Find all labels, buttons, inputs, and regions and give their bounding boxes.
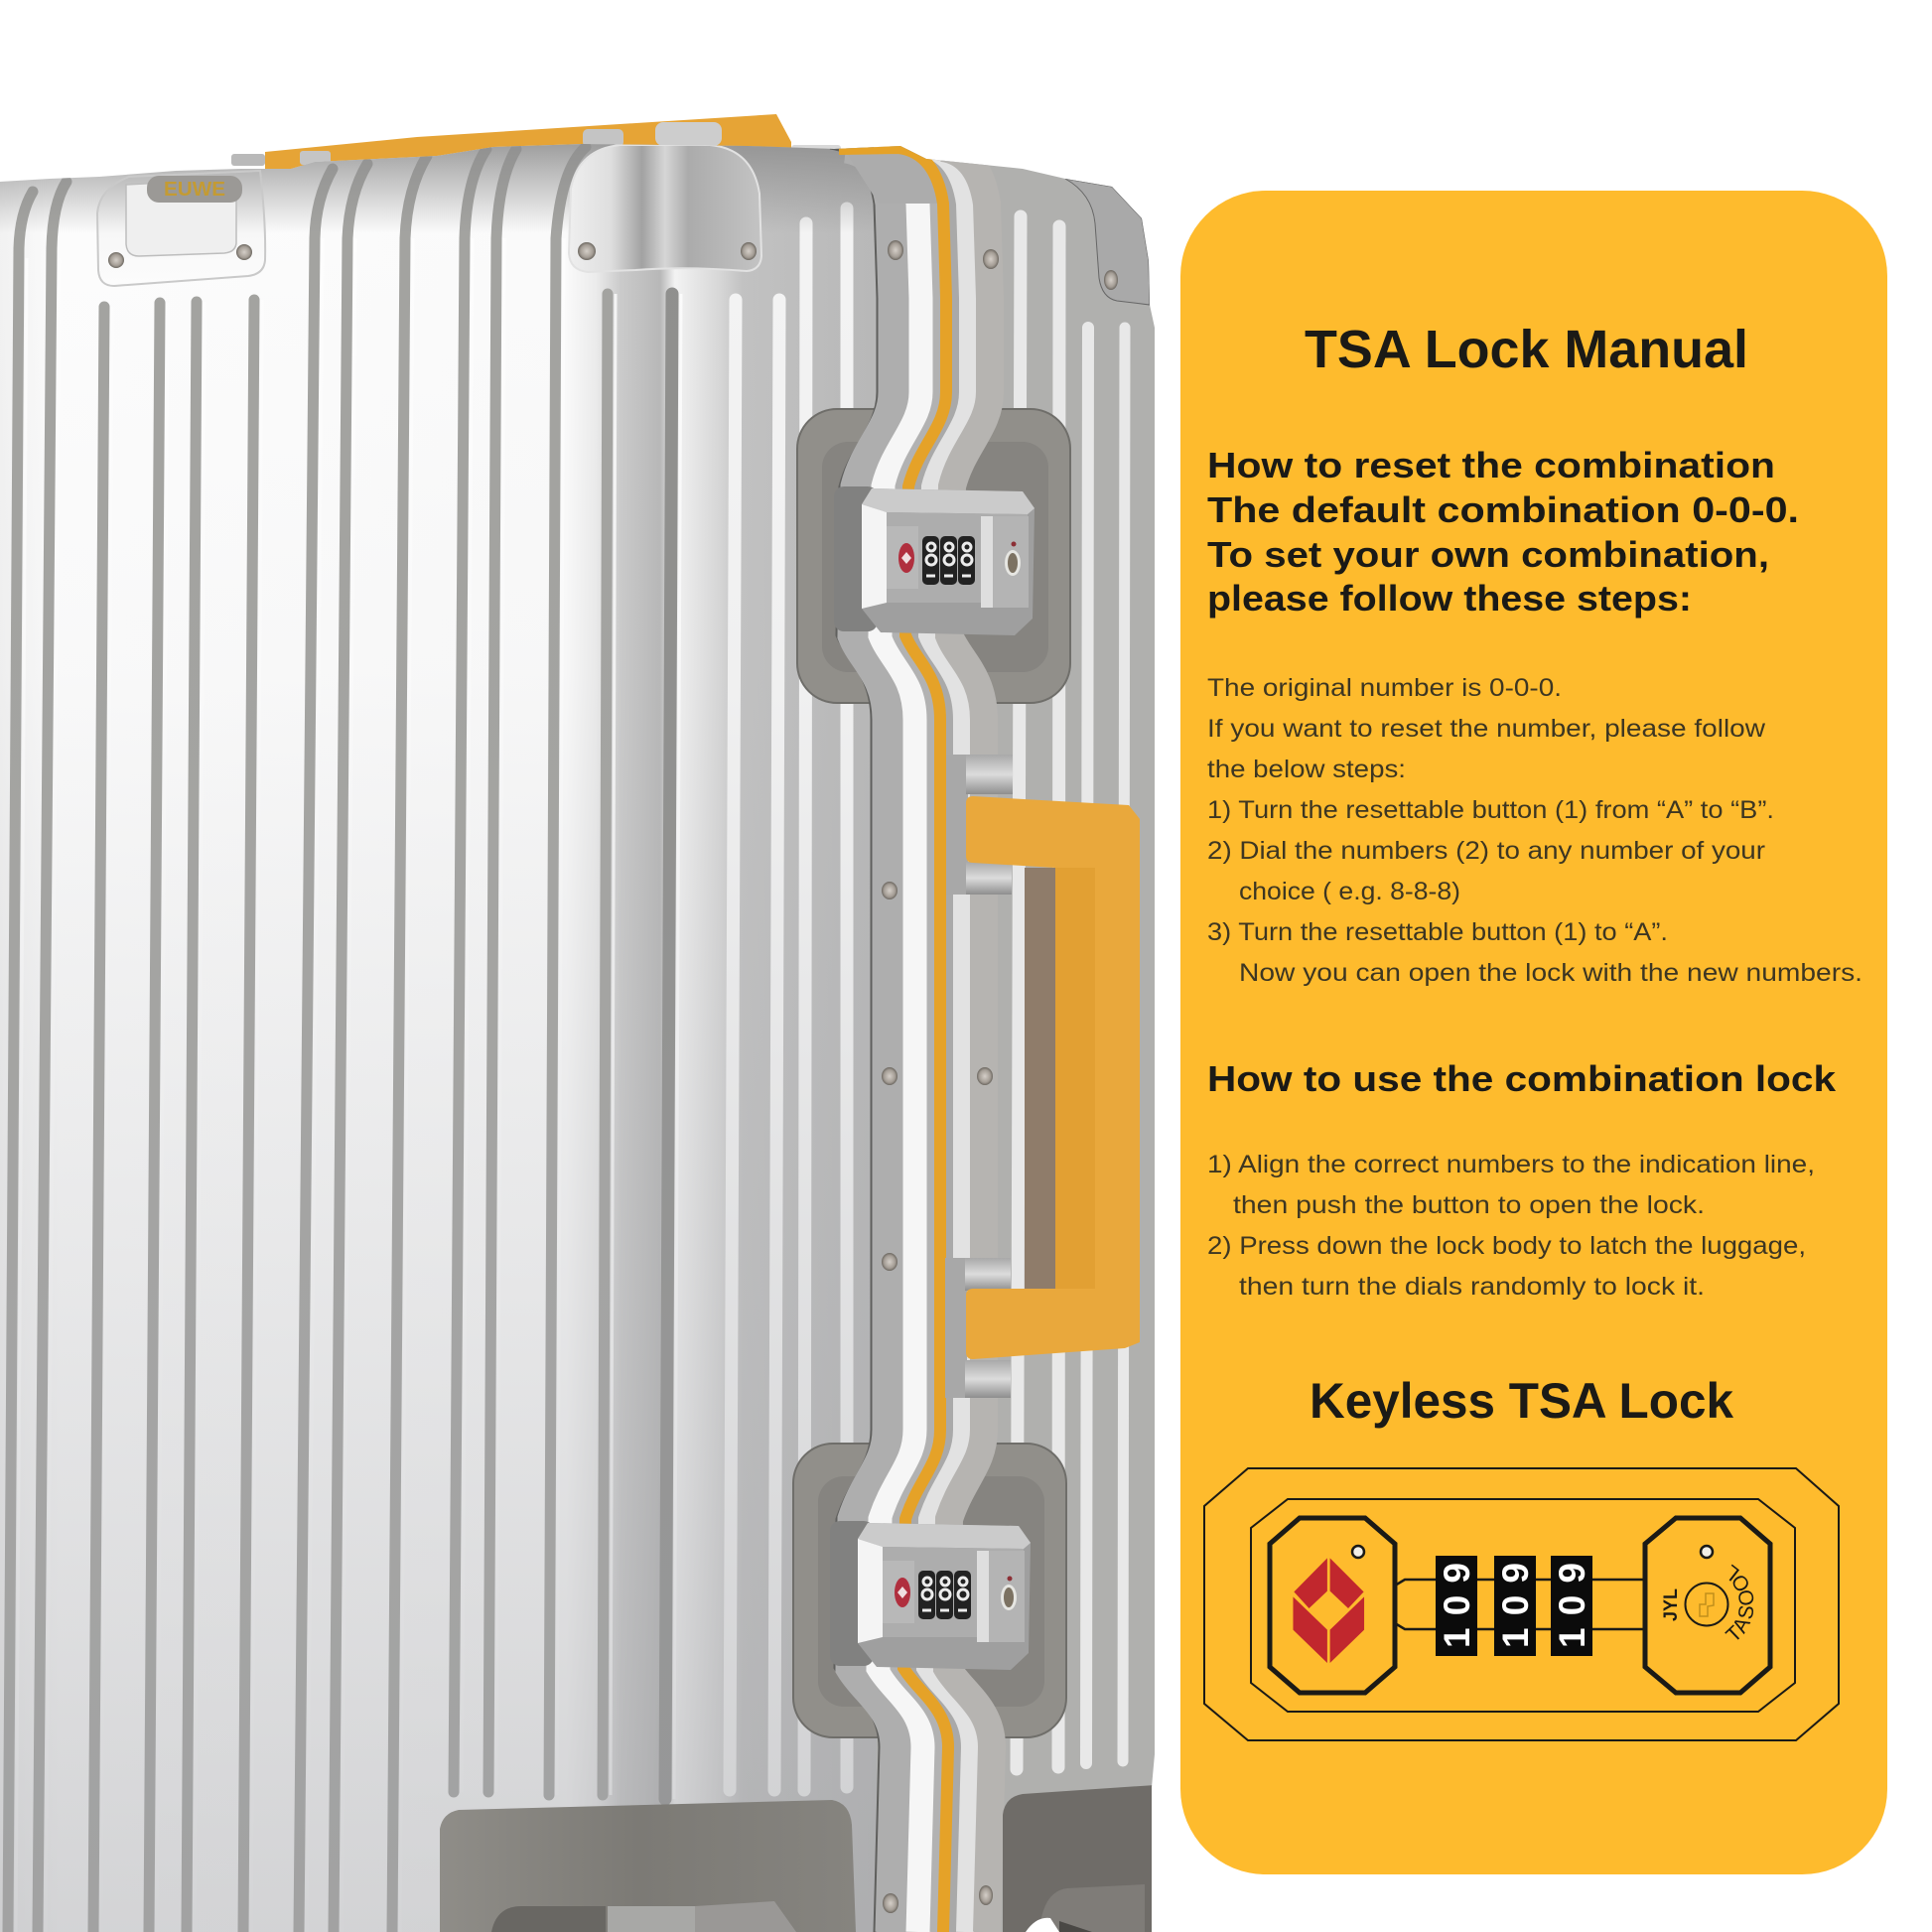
- text block: reset steps: the below steps:: [1207, 756, 1406, 783]
- dials: [922, 536, 975, 585]
- suitcase: aluminium shell: [0, 129, 1155, 1932]
- left top plate with logo: [97, 171, 265, 286]
- heading: how to reset: How to reset the combination: [1207, 445, 1775, 485]
- rivets: [108, 240, 1118, 1913]
- label JYL: JYL: [1661, 1588, 1682, 1621]
- outer outline: [1204, 1468, 1839, 1740]
- strips on the right panel: [1017, 216, 1125, 1769]
- top edge shading: [0, 144, 877, 233]
- lock body: [862, 488, 1035, 635]
- heading: how to reset: [1207, 445, 1799, 619]
- lock body: [858, 1523, 1031, 1670]
- lock side: [834, 486, 878, 631]
- text block: reset steps: If you want to reset the number, please follow: [1207, 715, 1766, 743]
- text block: use steps: then turn the dials randomly to lock it.: [1239, 1273, 1705, 1301]
- text block: use steps: [1207, 1151, 1815, 1301]
- indicator dots: [1352, 1546, 1713, 1558]
- face: [887, 512, 1029, 603]
- left key plate: [887, 526, 918, 589]
- top carry handle: [231, 114, 841, 171]
- connector lines: [1395, 1580, 1645, 1629]
- label curved: TASOOL: [1725, 1565, 1753, 1640]
- red badge: [895, 1578, 910, 1607]
- vertical shading: [0, 800, 877, 1932]
- wheel 2: 109: [1495, 1563, 1536, 1648]
- frame top wrap: [856, 149, 929, 204]
- right lock plate: [1645, 1518, 1770, 1693]
- right corner bumper: [1003, 1785, 1155, 1932]
- corner cap: [569, 145, 761, 272]
- diagram: keyless TSA lock: [1203, 1467, 1840, 1741]
- wheel 3: 109: [1552, 1563, 1592, 1648]
- right side panel: [877, 139, 1155, 1932]
- text block: reset steps: choice ( e.g. 8-8-8): [1239, 878, 1460, 905]
- top bevel: [862, 488, 1035, 514]
- shell base surface: [0, 129, 877, 1932]
- title: TSA Lock Manual: [1305, 320, 1748, 379]
- lock surround: top: [797, 409, 1070, 703]
- text block: reset steps: Now you can open the lock with the new numbers.: [1239, 959, 1863, 987]
- lower bracket: [945, 1258, 1011, 1398]
- heading: how to reset: please follow these steps:: [1207, 578, 1692, 619]
- right key plate: [977, 1551, 1025, 1642]
- panel background: [1180, 191, 1887, 1874]
- text block: reset steps: [1207, 674, 1863, 987]
- icon: red TSA diamond: [1293, 1558, 1364, 1663]
- upper bracket: [946, 755, 1013, 895]
- text block: reset steps: The original number is 0-0-0.: [1207, 674, 1562, 702]
- dials: [918, 1571, 971, 1619]
- key slot: [1001, 1577, 1017, 1610]
- brand badge: [147, 176, 242, 203]
- wheel 1: 109: [1437, 1563, 1477, 1648]
- combination lock: top: [834, 486, 1035, 635]
- brand badge: EUWE: [164, 179, 225, 201]
- lock side: [830, 1521, 874, 1666]
- text block: use steps: 2) Press down the lock body to latch the luggage,: [1207, 1232, 1806, 1260]
- panel: TSA lock manual: [1180, 191, 1887, 1874]
- heading: how to reset: The default combination 0-0-0.: [1207, 489, 1799, 530]
- lock surround: bottom: [793, 1444, 1066, 1737]
- heading: how to use: How to use the combination lock: [1207, 1058, 1837, 1099]
- heading: keyless TSA lock: Keyless TSA Lock: [1310, 1373, 1733, 1429]
- heading: how to reset: To set your own combination,: [1207, 534, 1769, 575]
- yellow grip: [966, 796, 1140, 1359]
- grip inner shade: [1055, 868, 1095, 1289]
- text block: reset steps: 1) Turn the resettable button (1) from “A” to “B”.: [1207, 796, 1774, 824]
- rib highlights: [610, 294, 683, 1799]
- bottom corner bumper: [440, 1800, 856, 1932]
- text block: reset steps: 3) Turn the resettable button (1) to “A”.: [1207, 918, 1668, 946]
- inner outline: [1251, 1499, 1795, 1712]
- handle recess: [1025, 868, 1056, 1289]
- red badge: [898, 543, 914, 573]
- text block: use steps: 1) Align the correct numbers to the indication line,: [1207, 1151, 1815, 1178]
- text block: reset steps: 2) Dial the numbers (2) to any number of your: [1207, 837, 1765, 865]
- white strips on the corner face: [730, 208, 847, 1790]
- left lock plate: [1270, 1518, 1395, 1693]
- right corner plate: [1065, 179, 1150, 305]
- right key plate: [981, 516, 1029, 608]
- left bevel: [858, 1539, 883, 1643]
- top bevel: [858, 1523, 1031, 1549]
- key cylinder: [1686, 1583, 1727, 1626]
- key slot: [1005, 542, 1021, 576]
- vertical ribs: [8, 147, 672, 1932]
- combination lock: bottom: [830, 1521, 1031, 1670]
- text block: use steps: then push the button to open the lock.: [1233, 1191, 1705, 1219]
- yellow seal: [839, 148, 948, 1932]
- face: [883, 1547, 1025, 1637]
- left key plate: [883, 1561, 914, 1623]
- aluminium frame strips with yellow seal: [830, 148, 992, 1932]
- dial wheels: [1436, 1556, 1592, 1656]
- side handle: [945, 755, 1140, 1398]
- left bevel: [862, 504, 887, 609]
